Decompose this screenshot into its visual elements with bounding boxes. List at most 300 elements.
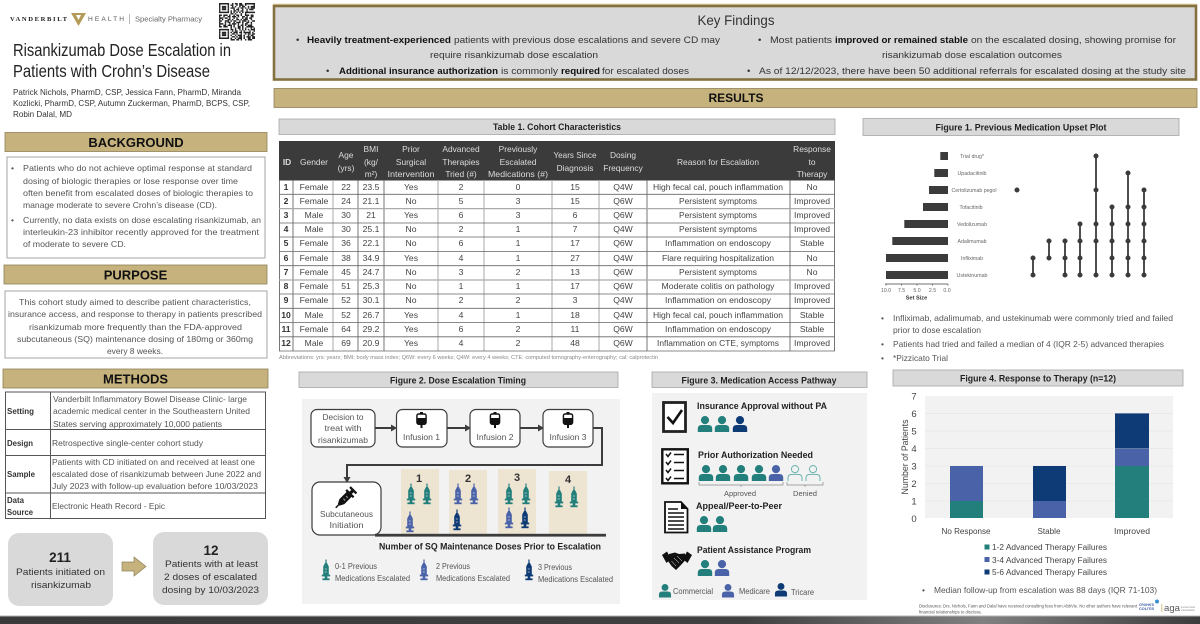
row 6: Q4W <box>613 253 634 263</box>
row 11: 64 <box>341 324 351 334</box>
pathway: prior authorization: Prior Authorization Needed <box>698 450 813 460</box>
figure 4 heading <box>893 370 1183 386</box>
row: sample: Patients with CD initiated on and received at least one <box>52 457 255 467</box>
row 11: 11 <box>281 324 291 334</box>
legend: previous medications escalated: 3 Previous <box>538 563 572 572</box>
row 8: Improved <box>794 281 830 291</box>
row: setting: Vanderbilt Inflammatory Bowel Disease Clinic- large <box>53 394 247 404</box>
dose column 4: 4 <box>565 474 572 486</box>
QR code <box>219 3 255 40</box>
step: infusion 3: Infusion 3 <box>550 432 587 442</box>
table header row <box>283 144 831 179</box>
finding: treatment-experienced: require risankizumab dose escalation <box>430 50 598 61</box>
set labels <box>952 154 996 279</box>
y axis labels: 0 <box>911 514 917 525</box>
row 3: 3 <box>284 210 289 220</box>
row 12: Q6W <box>613 338 634 348</box>
step: decision to treat <box>311 410 375 447</box>
y axis labels: 2 <box>911 479 917 490</box>
panel: background text: • <box>11 215 14 225</box>
step: subcutaneous initiation: Subcutaneous <box>320 509 373 519</box>
row 3: Yes <box>404 210 418 220</box>
disclosures <box>919 604 1138 614</box>
figure 4: stacked bar chart <box>900 392 1173 577</box>
figure 1 heading: Figure 1. Previous Medication Upset Plot <box>936 122 1107 134</box>
callout: 12 patients: dosing by 10/03/2023 <box>162 585 259 596</box>
row 3: Q6W <box>613 210 634 220</box>
row 10: 1 <box>516 310 521 320</box>
table header row: Medications (#) <box>488 169 548 179</box>
heading: purpose <box>4 265 267 284</box>
row 8: 1 <box>516 281 521 291</box>
row 5: 36 <box>341 238 351 248</box>
row 5: Q6W <box>613 238 634 248</box>
row: data source: Source <box>7 507 33 517</box>
finding: additional referrals: As of 12/12/2023, there have been 50 additional referrals for escalated dosing at the study site <box>759 66 1186 77</box>
row: setting: academic medical center in the Southeastern United <box>53 406 250 416</box>
table header row: Therapies <box>442 157 480 167</box>
callout: 12 patients: Patients with at least <box>165 559 258 570</box>
row 6: Female <box>300 253 329 263</box>
row 5: 17 <box>570 238 580 248</box>
row 8 <box>284 281 830 291</box>
pathway: prior authorization <box>662 449 823 498</box>
row 7: 13 <box>570 267 580 277</box>
row 11: Yes <box>404 324 418 334</box>
row 10: Yes <box>404 310 418 320</box>
authors <box>13 87 250 119</box>
dose column 3: 3 <box>514 472 520 484</box>
authors: Robin Dalal, MD <box>13 109 72 119</box>
panel: purpose text: insurance access, and response to therapy in patients prescribed <box>8 309 262 319</box>
row 2: 3 <box>516 196 521 206</box>
y axis title: Number of Patients <box>900 419 911 494</box>
dose column 3 <box>498 469 536 534</box>
row 4: 1 <box>516 224 521 234</box>
legend: previous medications escalated: Medications Escalated <box>436 574 510 583</box>
table header row: Escalated <box>500 157 537 167</box>
step: infusion 2: Infusion 2 <box>476 432 514 442</box>
heading: methods: METHODS <box>103 372 168 386</box>
finding: improved or stable <box>758 35 1177 61</box>
title <box>13 40 231 81</box>
title: Risankizumab Dose Escalation in <box>13 40 231 60</box>
set size axis: 2.5 <box>929 288 936 294</box>
row 2: Female <box>300 196 329 206</box>
authors: Patrick Nichols, PharmD, CSP, Jessica Fann, PharmD, Miranda <box>13 87 241 97</box>
row 12: 48 <box>570 338 580 348</box>
table footnote: abbreviations: Abbreviations: yrs: years; BMI: body mass index; Q6W: every 6 weeks; Q4W: every 4 weeks; CTE: computed tomography-enterography; cal: calprotectin <box>279 355 658 361</box>
chart legend: 3-4 Advanced Therapy Failures <box>992 555 1107 565</box>
row: sample: Sample <box>7 469 35 479</box>
finding: improved or stable: on the escalated dosing, showing promise for <box>971 35 1177 46</box>
panel: background text <box>7 157 265 258</box>
table header row: m²) <box>365 169 377 179</box>
row 9: Q4W <box>613 295 634 305</box>
row 5: 5 <box>284 238 289 248</box>
pathway: patient assistance: Patient Assistance Program <box>697 545 811 555</box>
row 5: Female <box>300 238 329 248</box>
row 5 <box>284 238 824 248</box>
figure 1 notes: *Pizzicato Trial <box>893 353 948 363</box>
finding: treatment-experienced: • <box>296 35 299 46</box>
row 7: 45 <box>341 267 351 277</box>
row: data source <box>7 495 166 517</box>
dose column 4 <box>549 471 587 534</box>
category labels: Improved <box>1114 526 1150 536</box>
row 1: High fecal cal, pouch inflammation <box>653 182 783 192</box>
table heading: Table 1. Cohort Characteristics <box>493 122 621 133</box>
callout: 12 patients: 12 <box>203 543 219 558</box>
set size axis: 5.0 <box>913 288 921 294</box>
row 7: Female <box>300 267 329 277</box>
sponsor logos: Association <box>1181 608 1196 612</box>
footer band <box>0 616 1200 624</box>
set size bars <box>886 152 948 279</box>
heading: background: BACKGROUND <box>88 135 184 150</box>
row: sample: July 2023 with follow-up evaluation before 10/03/2023 <box>52 481 258 491</box>
row 9: 2 <box>516 295 521 305</box>
row 7: Q6W <box>613 267 634 277</box>
sponsor logos <box>1139 600 1196 614</box>
row 3: Improved <box>794 210 830 220</box>
finding: insurance authorization: Additional insurance authorization <box>339 66 498 77</box>
step: infusion 2 <box>470 410 520 447</box>
row 6: 34.9 <box>363 253 380 263</box>
table header row: Previously <box>499 144 538 154</box>
row 7: 2 <box>516 267 521 277</box>
finding: insurance authorization: • <box>326 66 329 77</box>
table header row: Diagnosis <box>557 163 593 173</box>
row 4: Q4W <box>613 224 634 234</box>
figure 2: dose escalation timing <box>302 399 620 604</box>
set size axis <box>881 284 951 302</box>
icon: checklist <box>662 449 688 483</box>
panel: purpose text: This cohort study aimed to describe patient characteristics, <box>19 297 251 307</box>
table heading <box>279 119 835 134</box>
pathway: insurance approval: Insurance Approval without PA <box>697 401 827 411</box>
row 3: 21 <box>366 210 376 220</box>
table header row: Gender <box>300 157 328 167</box>
step: infusion 1: Infusion 1 <box>403 432 440 442</box>
table header row: Surgical <box>396 157 426 167</box>
row 8: 51 <box>341 281 351 291</box>
row 1: Q4W <box>613 182 634 192</box>
row 10: 4 <box>459 310 464 320</box>
y axis labels: 7 <box>911 392 917 402</box>
row 7: 7 <box>284 267 289 277</box>
callout: 211 patients: Patients initiated on <box>16 567 105 578</box>
panel: purpose text <box>5 291 267 358</box>
finding: treatment-experienced <box>296 35 720 61</box>
row 6: Yes <box>404 253 418 263</box>
title: Patients with Crohn’s Disease <box>13 61 210 81</box>
heading: results: RESULTS <box>708 91 764 105</box>
table header row: to <box>808 157 816 167</box>
row 3: 30 <box>341 210 351 220</box>
sponsor logos: aga <box>1164 603 1181 614</box>
table header row: Reason for Escalation <box>677 157 759 167</box>
heading: methods <box>3 369 268 388</box>
row 7: 3 <box>459 267 464 277</box>
row 1: 22 <box>341 182 351 192</box>
y axis labels: 5 <box>911 426 917 438</box>
row 10: 52 <box>341 310 351 320</box>
row 3: Persistent symptoms <box>679 210 757 220</box>
row 1: 2 <box>459 182 464 192</box>
figure 1 notes: prior to dose escalation <box>893 325 981 335</box>
y axis labels: 3 <box>911 462 917 472</box>
step: infusion 3 <box>543 410 593 447</box>
panel: background text: interleukin-23 inhibitor recently approved for the treatment <box>23 227 260 237</box>
legend: previous medications escalated: 2 Previous <box>436 562 470 571</box>
row 4: 30 <box>341 224 351 234</box>
row 9: 9 <box>284 295 289 305</box>
row 10: Male <box>305 310 324 320</box>
row 1 <box>284 182 818 192</box>
row 8: No <box>406 281 417 291</box>
disclosures: financial relationships to disclose. <box>919 610 982 614</box>
figure 3 heading: Figure 3. Medication Access Pathway <box>682 376 837 386</box>
row 2: 5 <box>459 196 464 206</box>
set size axis: 0.0 <box>943 288 951 294</box>
panel: purpose text: risankizumab more frequently than the FDA-approved <box>29 322 242 332</box>
row 2: Q6W <box>613 196 634 206</box>
panel: background text: manage moderate to severe Crohn’s disease (CD). <box>23 200 217 210</box>
row 3 <box>284 210 830 220</box>
legend: previous medications escalated <box>322 560 613 584</box>
row 1: Female <box>300 182 329 192</box>
insurance legend: Commercial <box>673 587 713 596</box>
finding: insurance authorization <box>326 66 689 77</box>
y axis labels: 4 <box>911 444 917 455</box>
pathway: appeal: Appeal/Peer-to-Peer <box>696 501 782 511</box>
row 2 <box>284 196 830 206</box>
row 4: 2 <box>459 224 464 234</box>
set labels: Trial drug* <box>960 154 984 160</box>
callout: 12 patients: 2 doses of escalated <box>164 572 257 583</box>
row 1: 23.5 <box>363 182 380 192</box>
row: setting <box>7 394 250 429</box>
row 9: Inflammation on endoscopy <box>665 295 772 305</box>
key findings heading: Key Findings <box>698 13 775 28</box>
header logo: VANDERBILT <box>10 16 68 23</box>
icon: document <box>665 502 688 532</box>
arrows between steps <box>344 424 602 483</box>
figure 3 heading <box>652 372 867 388</box>
table header row: ID <box>283 157 291 167</box>
legend: previous medications escalated: Medications Escalated <box>335 574 410 583</box>
table header row: Years Since <box>554 150 597 160</box>
step: decision to treat: risankizumab <box>318 435 368 445</box>
finding: improved or stable: improved or remained stable <box>835 35 968 46</box>
step: decision to treat: treat with <box>324 423 362 433</box>
row 6: 4 <box>459 253 464 263</box>
finding: additional referrals: • <box>747 66 750 77</box>
row 9: 30.1 <box>363 295 380 305</box>
row 8: Q6W <box>613 281 634 291</box>
panel: key findings <box>273 4 1197 79</box>
row 11: 29.2 <box>363 324 380 334</box>
heading: background <box>5 132 267 152</box>
step: decision to treat: Decision to <box>322 412 364 422</box>
finding: treatment-experienced: patients with previous dose escalations and severe CD may <box>454 35 720 46</box>
bar: no response <box>950 466 983 518</box>
row: setting: Setting <box>7 406 34 416</box>
row 4: Persistent symptoms <box>679 224 757 234</box>
chart legend: 5-6 Advanced Therapy Failures <box>992 567 1107 577</box>
row 12: 12 <box>281 338 291 348</box>
panel: purpose text: every 8 weeks. <box>107 346 163 356</box>
pathway: patient assistance <box>662 545 811 576</box>
row 3: 6 <box>573 210 578 220</box>
finding: insurance authorization: for escalated doses <box>602 66 689 77</box>
finding: insurance authorization: is commonly <box>501 66 558 77</box>
icon: syringe <box>332 486 358 511</box>
row 11: Inflammation on endoscopy <box>665 324 772 334</box>
row 12: Inflammation on CTE, symptoms <box>657 338 779 348</box>
row 4: 4 <box>284 224 289 234</box>
chart legend: 1-2 Advanced Therapy Failures <box>992 542 1107 552</box>
row 9: No <box>406 295 417 305</box>
sponsor logos: COLITIS <box>1139 607 1155 611</box>
heading: purpose: PURPOSE <box>104 268 168 282</box>
row 7: Persistent symptoms <box>679 267 757 277</box>
row 11: 11 <box>571 324 580 334</box>
disclosures: Disclosures: Drs. Nichols, Fann and Dalal have received consulting fees from AbbVie. No other authors have relevant <box>919 604 1138 608</box>
row: design: Retrospective single-center cohort study <box>52 438 204 448</box>
callout: 211 patients <box>8 533 113 606</box>
row 6: 6 <box>284 253 289 263</box>
finding: improved or stable: • <box>758 35 761 46</box>
set labels: Tofacitinib <box>960 205 983 211</box>
row 2: 21.1 <box>363 196 380 206</box>
row 6: Flare requiring hospitalization <box>662 253 774 263</box>
row 9: Improved <box>794 295 830 305</box>
figure 1 notes: • <box>881 339 884 349</box>
row 10: 26.7 <box>363 310 380 320</box>
row 2: Persistent symptoms <box>679 196 757 206</box>
step: subcutaneous initiation: Initiation <box>330 520 364 530</box>
row 12: 4 <box>459 338 464 348</box>
panel: background text: often benefit from escalated doses of biologic therapies to <box>23 188 253 198</box>
table 1: cohort characteristics <box>279 141 835 351</box>
row 12: 20.9 <box>363 338 380 348</box>
row 6: 27 <box>570 253 580 263</box>
y axis labels <box>911 392 917 525</box>
row 8: Female <box>300 281 329 291</box>
row: sample: escalated dose of risankizumab between June 2022 and <box>52 469 261 479</box>
pathway: appeal <box>665 501 782 532</box>
y axis labels: 1 <box>911 496 917 508</box>
sponsor logos: CROHN'S <box>1139 603 1155 607</box>
set size axis: 10.0 <box>881 288 891 294</box>
row 8: 25.3 <box>363 281 380 291</box>
table header row: Response <box>793 144 831 154</box>
row 12: Improved <box>794 338 830 348</box>
callout: 211 patients: 211 <box>49 550 71 565</box>
row 11: Female <box>300 324 329 334</box>
finding: improved or stable: risankizumab dose escalation outcomes <box>882 50 1062 61</box>
table header row: Advanced <box>442 144 480 154</box>
set labels: Certolizumab pegol <box>952 188 996 194</box>
table header row: Therapy <box>797 169 828 179</box>
row 10: 10 <box>281 310 291 320</box>
arrow: patient flow <box>122 557 146 576</box>
header logo: HEALTH <box>88 16 124 23</box>
figure 1 notes: Infliximab, adalimumab, and ustekinumab were commonly tried and failed <box>893 313 1173 323</box>
row 11: Q6W <box>613 324 634 334</box>
row 12: 2 <box>516 338 521 348</box>
row 3: 6 <box>459 210 464 220</box>
row 1: 1 <box>284 182 289 192</box>
row 9: 52 <box>341 295 351 305</box>
figure 2 heading: Figure 2. Dose Escalation Timing <box>390 376 526 386</box>
row 7 <box>284 267 818 277</box>
row 10 <box>281 310 824 320</box>
row 9: 2 <box>459 295 464 305</box>
row 1: 0 <box>516 182 521 192</box>
row 1: Yes <box>404 182 418 192</box>
row 4 <box>284 224 830 234</box>
table header row: Tried (#) <box>445 169 477 179</box>
row 5: No <box>406 238 417 248</box>
finding: improved or stable: Most patients <box>770 35 832 46</box>
row 10: High fecal cal, pouch inflammation <box>653 310 783 320</box>
row 1: No <box>806 182 818 192</box>
row 5: 22.1 <box>363 238 380 248</box>
row 4: Male <box>305 224 324 234</box>
y axis labels: 6 <box>911 409 917 420</box>
row 10: 18 <box>570 310 580 320</box>
figure 1 notes: • <box>881 313 884 323</box>
set labels: Upadacitinib <box>958 171 987 177</box>
table header row: Dosing <box>610 150 636 160</box>
category labels <box>942 526 1150 536</box>
dose timeline baseline <box>375 534 606 537</box>
panel: background text: of moderate to severe CD. <box>23 239 126 249</box>
row 4: Improved <box>794 224 830 234</box>
row 11: 6 <box>459 324 464 334</box>
callout: 12 patients <box>153 532 268 605</box>
category labels: Stable <box>1038 526 1061 536</box>
insurance legend <box>659 583 814 597</box>
row 6 <box>284 253 818 263</box>
step: infusion 1 <box>396 410 447 447</box>
bar: stable <box>1033 466 1066 518</box>
panel: background text: Currently, no data exists on dose escalating risankizumab, an <box>23 215 261 225</box>
row 2: No <box>406 196 417 206</box>
row 12: 69 <box>341 338 351 348</box>
dose column 1: 1 <box>416 473 422 485</box>
authors: Kozlicki, PharmD, CSP, Autumn Zuckerman, PharmD, BCPS, CSP, <box>13 98 250 108</box>
row 12 <box>281 338 830 348</box>
row: data source: Data <box>7 495 24 505</box>
row 8: 1 <box>459 281 464 291</box>
row 11 <box>281 324 824 334</box>
row: design: Design <box>7 438 33 448</box>
figure 3: medication access pathway <box>652 393 867 600</box>
row 3: 3 <box>516 210 521 220</box>
row 9: 3 <box>573 295 578 305</box>
row: data source: Electronic Heath Record - Epic <box>52 501 166 511</box>
figure 4 heading: Figure 4. Response to Therapy (n=12) <box>960 374 1116 384</box>
table header row: Frequency <box>603 163 644 173</box>
row 4: 25.1 <box>363 224 380 234</box>
figure 2 heading <box>299 372 618 388</box>
row 5: Stable <box>800 238 824 248</box>
figure 1: upset plot <box>881 152 1146 302</box>
